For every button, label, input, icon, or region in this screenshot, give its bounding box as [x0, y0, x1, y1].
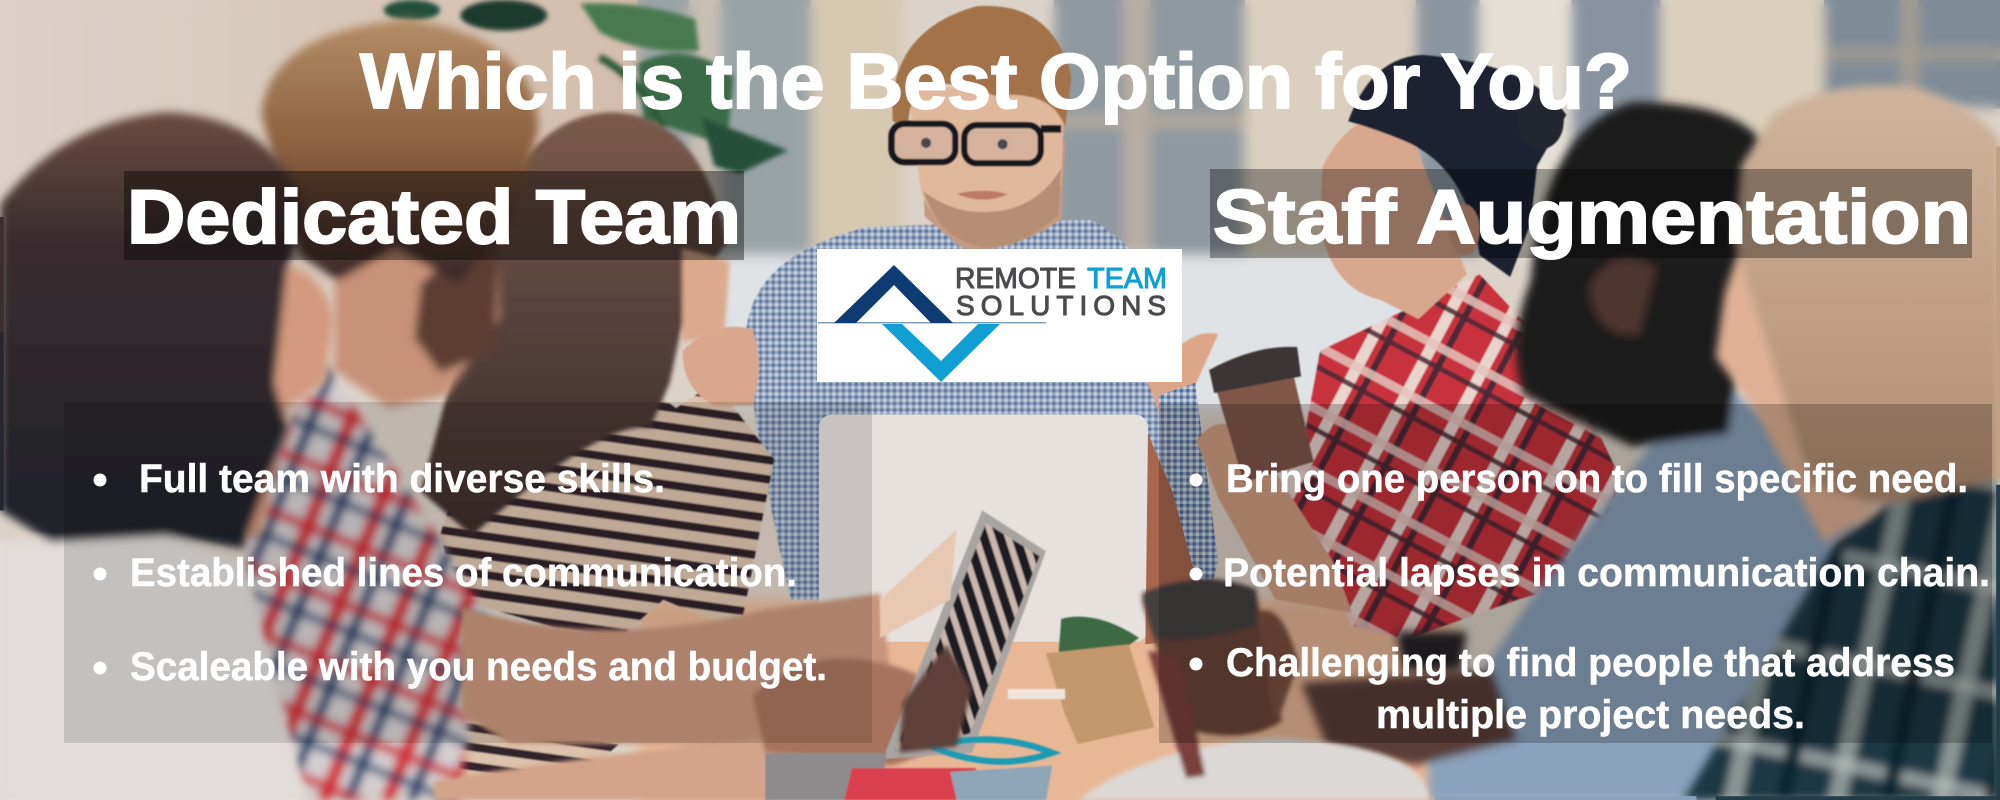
bullet item: lines of communication: Established lines of communication. [130, 551, 797, 595]
person: man with dark skin and blue denim shirt [1301, 102, 1862, 800]
person: woman with dark hair, light top [0, 112, 334, 800]
bullet item: one person: Bring one person on to fill specific need. [1226, 457, 1968, 501]
bullet item: full team: Full team with diverse skills. [139, 457, 665, 501]
bullet item: challenging to find people [1190, 641, 1955, 737]
title: Which is the Best Option for You? [360, 37, 1632, 125]
person: blonde woman with dark plaid shirt [1684, 85, 2000, 800]
logo: Remote Team Solutions: SOLUTIONS [956, 290, 1166, 321]
logo: Remote Team Solutions: REMOTE [955, 263, 1076, 295]
foreground forearms [434, 593, 964, 800]
panel: Dedicated Team bullet list backdrop [64, 402, 872, 743]
bullet item: scaleable: Scaleable with you needs and budget. [130, 645, 827, 689]
person: woman with red plaid shirt and coffee cup [1196, 55, 1617, 641]
tablet and table objects [765, 510, 1154, 800]
heading: Dedicated Team: Dedicated Team [127, 175, 741, 260]
bullet item: challenging to find people: multiple project needs. [1376, 693, 1805, 737]
person: man with brown hair, red plaid shirt [242, 19, 538, 800]
bullet item: challenging to find people: Challenging to find people that address [1226, 641, 1955, 685]
heading: Staff Augmentation: Staff Augmentation [1213, 175, 1971, 260]
foreground paper, coffee cup and hand [1078, 579, 1429, 800]
person: central man with glasses [746, 6, 1218, 644]
person: woman in striped top [440, 327, 774, 778]
bullet list: Dedicated Team [94, 457, 827, 689]
panel: Dedicated Team heading backdrop [124, 171, 744, 260]
logo: Remote Team Solutions: TEAM [1087, 263, 1167, 295]
panel: Staff Augmentation heading backdrop [1210, 169, 1972, 258]
logo: Remote Team Solutions [817, 249, 1182, 382]
hand reflected over the tablet [899, 644, 972, 753]
potted plant leaves behind the team [384, 0, 788, 174]
laptop lid [819, 415, 1148, 642]
hair of woman in striped top [421, 112, 730, 536]
bullet item: communication lapses: Potential lapses in communication chain. [1223, 551, 1990, 595]
bullet list: Staff Augmentation [1190, 457, 1990, 737]
panel: Staff Augmentation bullet list backdrop [1159, 404, 1992, 743]
